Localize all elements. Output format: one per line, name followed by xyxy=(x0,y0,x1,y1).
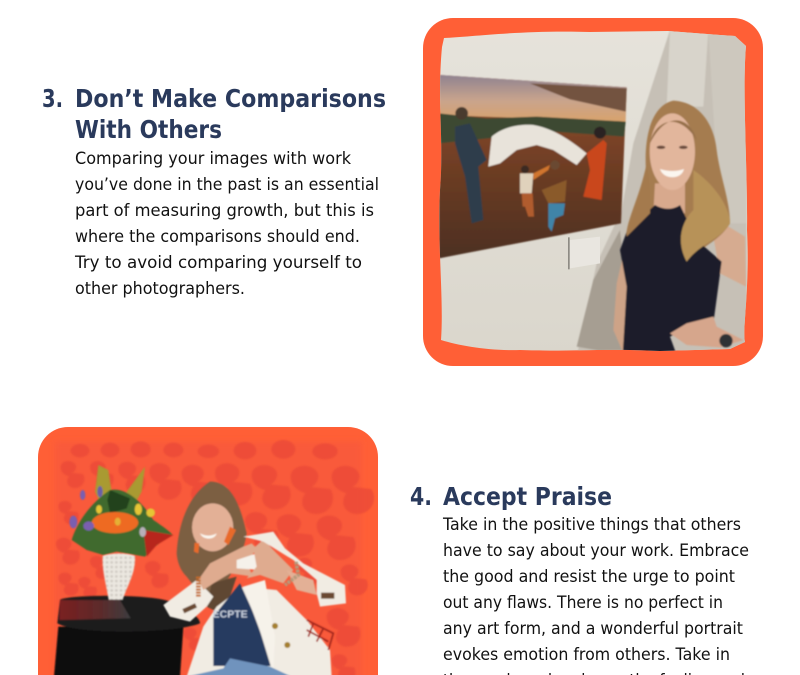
heading: don't make comparisons: With Others xyxy=(75,115,222,144)
body text: section 4: any art form, and a wonderful portrait xyxy=(443,619,743,638)
body text: section 3: part of measuring growth, but this is xyxy=(75,201,374,220)
neck xyxy=(653,183,685,213)
man holding cloth xyxy=(455,123,487,223)
white hobnail vase xyxy=(103,553,135,600)
body text: section 3: you’ve done in the past is an essential xyxy=(75,175,379,194)
hair xyxy=(177,482,247,607)
chair xyxy=(307,620,333,650)
section 4: accept praise text xyxy=(410,482,749,675)
body text: section 4: the good and resist the urge to point xyxy=(443,567,736,586)
body text: section 4: evokes emotion from others. Take in xyxy=(443,645,730,664)
body text: section 4: out any flaws. There is no perfect in xyxy=(443,593,723,612)
print caption placard xyxy=(568,237,600,269)
children xyxy=(533,165,550,180)
woman portrait xyxy=(613,101,746,355)
right sleeve xyxy=(243,532,346,607)
heading: don't make comparisons xyxy=(75,84,386,144)
presenter: ECPTE xyxy=(213,609,248,620)
body text: section 4: Take in the positive things that others xyxy=(442,515,741,534)
orange card background xyxy=(423,18,763,366)
woman in red dress xyxy=(583,140,607,200)
presenter xyxy=(163,482,346,675)
orange card background xyxy=(38,427,378,675)
round black table xyxy=(54,596,200,675)
white blazer body xyxy=(187,587,332,675)
body text: section 3: other photographers. xyxy=(75,279,245,298)
face xyxy=(650,113,695,190)
body text: section 4: have to say about your work. Embrace xyxy=(443,541,749,560)
navy t-shirt with logo xyxy=(213,583,271,666)
arms and shoulders xyxy=(613,260,628,350)
left sleeve xyxy=(163,580,213,622)
hand on hip with watch xyxy=(670,317,743,347)
body text: section 4 xyxy=(442,515,749,675)
flower arrangement xyxy=(69,465,173,557)
heading: number 3: 3. xyxy=(42,84,63,113)
bracelets and buttons xyxy=(285,562,298,585)
section 3: don't make comparisons text xyxy=(42,84,386,298)
black dress xyxy=(620,205,722,355)
white cloth xyxy=(488,125,587,167)
heading: accept praise: Accept Praise xyxy=(443,482,612,511)
tablet on table xyxy=(59,600,131,620)
hair front xyxy=(681,170,730,262)
heading: number 4: 4. xyxy=(410,482,432,511)
body text: section 3: where the comparisons should end. xyxy=(75,227,360,246)
face xyxy=(192,503,233,551)
body text: section 3 xyxy=(74,149,379,298)
wavy photo: gallery wall xyxy=(433,27,753,360)
heart hands xyxy=(198,543,257,590)
body text: section 3: Try to avoid comparing yourself to xyxy=(74,253,362,272)
photo card: photographer beside her framed print xyxy=(423,18,763,366)
photo card: presenter making a heart with her hands xyxy=(38,427,378,675)
body text: section 3: Comparing your images with work xyxy=(75,149,351,168)
squirrel logo pattern xyxy=(56,440,374,675)
lapel xyxy=(243,579,268,634)
jeans xyxy=(187,658,292,675)
hair lower strands xyxy=(207,577,237,612)
hair back xyxy=(644,100,730,248)
framed print xyxy=(439,75,627,258)
heading: don't make comparisons: Don’t Make Comparisons xyxy=(75,84,386,113)
